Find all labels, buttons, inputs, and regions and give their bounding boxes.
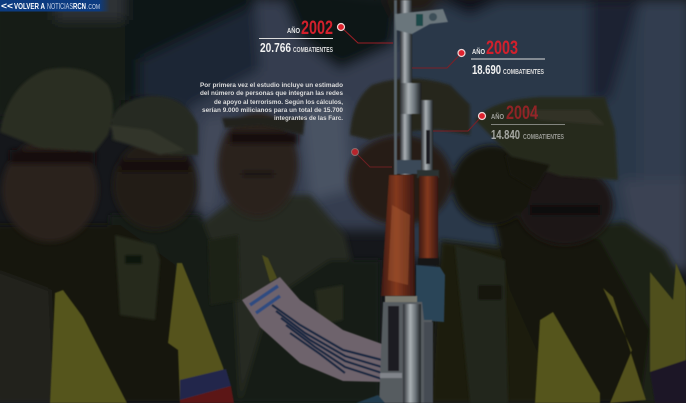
callout: 2002: AÑO bbox=[287, 26, 300, 35]
callout: 2004 bbox=[491, 103, 565, 142]
text block: estudio: del número de personas que integran las redes bbox=[200, 90, 343, 97]
callout: 2002 bbox=[259, 18, 333, 55]
back link bar: RCN bbox=[73, 2, 86, 11]
callout: 2002: 20.766 bbox=[260, 41, 291, 55]
leader line and dot: 2003 bbox=[412, 50, 465, 68]
text block: estudio: Por primera vez el estudio incluye un estimado bbox=[200, 82, 343, 89]
text block: estudio bbox=[200, 82, 343, 122]
callout: 2004: 14.840 bbox=[491, 128, 520, 142]
callout: 2003: 2003 bbox=[486, 38, 518, 59]
back link bar: << bbox=[1, 1, 13, 11]
callout: 2003: COMBATIENTES bbox=[503, 69, 544, 76]
text block: estudio: serían 9.000 milicianos para un total de 15.700 bbox=[202, 107, 343, 114]
callout: 2003: 18.690 bbox=[472, 63, 501, 77]
callout: 2002: COMBATIENTES bbox=[293, 47, 333, 54]
leader line and dot: 2004 bbox=[433, 112, 486, 131]
soldier faces bbox=[2, 113, 613, 245]
back link bar bbox=[0, 0, 110, 12]
yellow flag bands bbox=[50, 255, 686, 403]
callout: 2003: AÑO bbox=[472, 47, 485, 56]
rifle bbox=[242, 0, 448, 403]
soldier caps bbox=[0, 68, 618, 190]
leader line and dot: 2002 bbox=[338, 24, 393, 43]
back link bar: NOTICIAS bbox=[47, 2, 73, 11]
rifle wooden handguard bbox=[381, 175, 439, 296]
text block: estudio: de apoyo al terrorismo. Según los cálculos, bbox=[214, 99, 343, 106]
callout: 2004: AÑO bbox=[491, 112, 504, 121]
back link bar: VOLVER A bbox=[14, 2, 45, 11]
callout: 2004: 2004 bbox=[506, 103, 538, 124]
text block: estudio: integrantes de las Farc. bbox=[274, 115, 343, 122]
soldier bodies bbox=[0, 195, 686, 403]
callout: 2003 bbox=[471, 38, 545, 77]
callout: 2002: 2002 bbox=[301, 18, 333, 39]
rifle barrel and front sight bbox=[394, 0, 448, 178]
callout: 2004: COMBATIENTES bbox=[523, 134, 564, 141]
rifle magazine bbox=[242, 277, 385, 382]
leader line and dot: milicianos bbox=[352, 148, 392, 167]
rifle receiver bbox=[356, 265, 445, 403]
back link bar: .COM bbox=[87, 4, 100, 11]
backpack straps bbox=[115, 235, 508, 403]
